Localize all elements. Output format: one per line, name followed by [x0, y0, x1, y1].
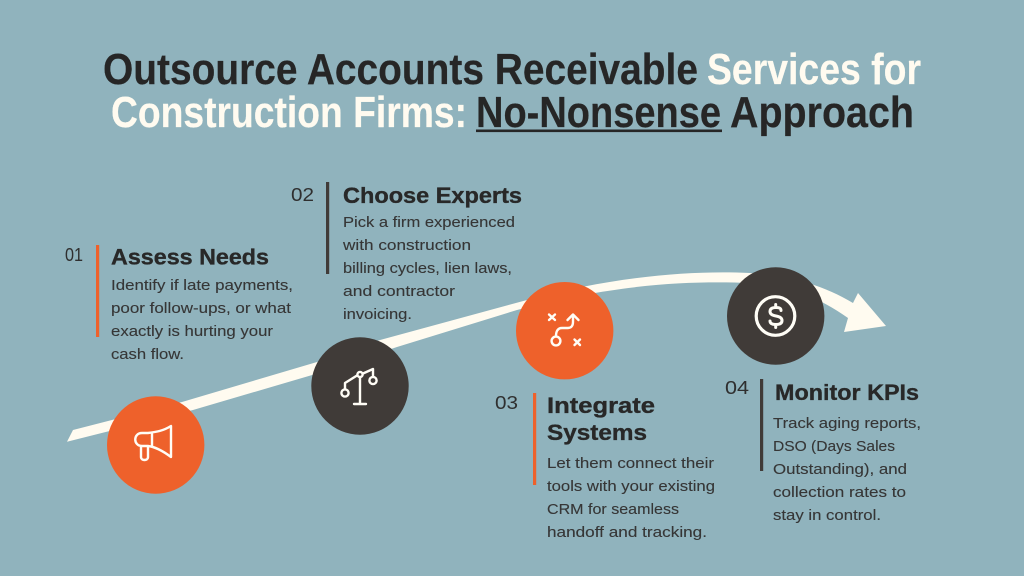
panel: step 02 choose experts: Choose Experts [343, 183, 522, 208]
panel: step 01 assess needs: exactly is hurting your [111, 323, 273, 340]
panel: step 01 assess needs: poor follow-ups, or what [111, 300, 292, 317]
panel: step 04 monitor KPIs: stay in control. [773, 507, 881, 524]
icon: balance scale [311, 337, 409, 435]
title: Services for [707, 45, 921, 94]
icon: dollar coin [727, 267, 824, 365]
title: Approach [730, 88, 914, 137]
panel: step 01 assess needs: cash flow. [111, 346, 184, 363]
panel: step 04 monitor KPIs: Track aging reports, [773, 415, 921, 432]
panel: step 03 integrate systems: CRM for seamless [547, 501, 679, 518]
panel: step 01 assess needs: Identify if late payments, [111, 277, 293, 294]
panel: step 04 monitor KPIs: Outstanding), and [773, 461, 907, 478]
panel: step 02 choose experts: invoicing. [343, 306, 412, 323]
panel: step 03 integrate systems [495, 392, 715, 541]
panel: step 01 assess needs: Assess Needs [111, 244, 269, 270]
panel: step 03 integrate systems: 03 [495, 392, 518, 413]
panel: step 01 assess needs [65, 244, 293, 363]
title: No-Nonsense [476, 88, 721, 137]
panel: step 02 choose experts: with construction [342, 237, 471, 254]
panel: step 02 choose experts: billing cycles, lien laws, [343, 260, 512, 277]
panel: step 02 choose experts: 02 [291, 184, 314, 205]
title [103, 45, 921, 137]
title: Outsource Accounts Receivable [103, 45, 698, 94]
panel: step 04 monitor KPIs: DSO (Days Sales [773, 438, 895, 455]
icon: strategy path [516, 282, 613, 379]
panel: step 03 integrate systems: tools with your existing [547, 478, 715, 495]
panel: step 01 assess needs: 01 [65, 244, 83, 265]
panel: step 03 integrate systems: Systems [547, 420, 647, 445]
panel: step 03 integrate systems: Let them connect their [547, 455, 714, 472]
arrow: rising curved path [67, 272, 886, 442]
panel: step 02 choose experts: and contractor [343, 283, 455, 300]
title: Construction Firms: [111, 88, 467, 137]
icon: megaphone [107, 396, 204, 494]
panel: step 02 choose experts [291, 182, 522, 323]
panel: step 02 choose experts: Pick a firm experienced [343, 214, 515, 231]
panel: step 04 monitor KPIs: collection rates to [773, 484, 906, 501]
panel: step 04 monitor KPIs [725, 377, 921, 524]
panel: step 04 monitor KPIs: Monitor KPIs [775, 380, 919, 405]
panel: step 04 monitor KPIs: 04 [725, 377, 749, 398]
panel: step 03 integrate systems: handoff and tracking. [547, 524, 707, 541]
panel: step 03 integrate systems: Integrate [547, 393, 655, 418]
